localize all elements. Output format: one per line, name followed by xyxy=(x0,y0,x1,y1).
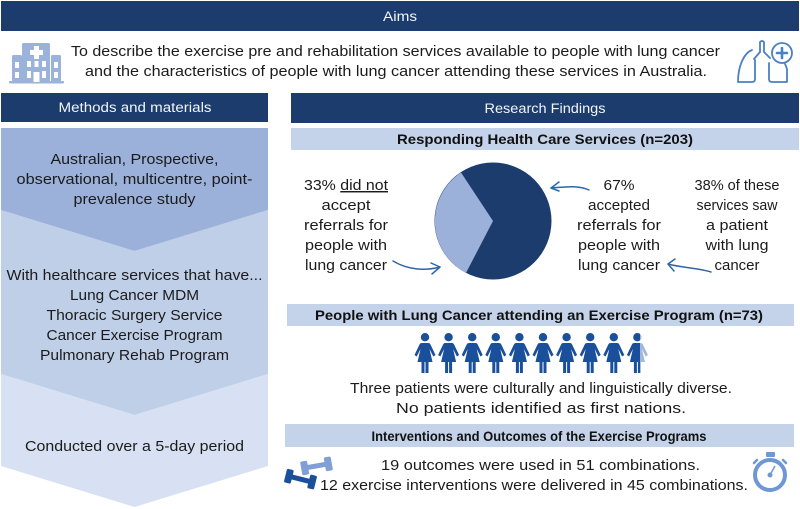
text: 67% accepted: people with xyxy=(578,238,660,254)
panel: methods flow xyxy=(1,128,268,507)
header: Research Findings xyxy=(291,93,799,123)
subheading: Responding Health Care Services xyxy=(291,128,799,150)
step 1: study design xyxy=(1,128,268,251)
text: outcomes and interventions: 19 outcomes were used in 51 combinations. xyxy=(381,458,700,474)
subheading: Responding Health Care Services: Responding Health Care Services (n=203) xyxy=(397,131,693,147)
text: 33% did not accept: accept xyxy=(322,198,370,214)
header: Methods and materials: Methods and materials xyxy=(58,100,212,115)
pie chart: referrals accepted xyxy=(434,162,552,280)
text: patient demographics: No patients identified as first nations. xyxy=(396,401,686,417)
step 3: study period: Conducted over a 5-day period xyxy=(25,439,244,455)
text: 67% accepted: referrals for xyxy=(577,218,661,234)
header: Aims xyxy=(1,1,799,31)
header: Aims: Aims xyxy=(383,9,417,24)
step 2: healthcare services: Lung Cancer MDM xyxy=(70,288,199,304)
text: 38% of these services: a patient xyxy=(706,218,768,234)
text: 67% accepted: 67% xyxy=(604,178,635,194)
subheading: People with Lung Cancer xyxy=(287,304,794,326)
arrow: to light wedge xyxy=(393,261,440,274)
text: 67% accepted: accepted xyxy=(588,198,650,214)
step 2: healthcare services: Pulmonary Rehab Program xyxy=(40,348,229,364)
text: 33% did not accept: 33% did not xyxy=(304,178,388,194)
step 2: healthcare services: With healthcare services that have... xyxy=(6,268,262,284)
text: patient demographics: Three patients were culturally and linguistically diverse. xyxy=(350,381,732,397)
text: 38% of these services: 38% of these xyxy=(694,178,780,194)
text: outcomes and interventions xyxy=(320,458,748,494)
arrow: from 38% to 67% xyxy=(668,259,711,272)
text: 33% did not accept: lung cancer xyxy=(305,258,387,274)
icon: stopwatch xyxy=(754,452,786,490)
icon: dumbbells xyxy=(284,456,333,490)
icon: lungs with plus xyxy=(738,41,792,82)
text: outcomes and interventions: 12 exercise interventions were delivered in 45 combinations. xyxy=(320,478,748,494)
text: 33% did not accept: people with xyxy=(305,238,387,254)
header: Methods and materials xyxy=(1,93,268,122)
step 1: study design: observational, multicentre, point- xyxy=(16,172,253,188)
aims statement xyxy=(71,43,720,80)
step 3: study period xyxy=(1,374,268,507)
text: 38% of these services: cancer xyxy=(714,258,760,274)
icon row: ten people xyxy=(414,333,650,374)
subheading: People with Lung Cancer: People with Lung Cancer attending an Exercise Program (n=73) xyxy=(315,307,763,323)
step 2: healthcare services: Thoracic Surgery Service xyxy=(46,308,222,324)
text: 38% of these services xyxy=(694,178,780,274)
aims statement: and the characteristics of people with lung cancer attending these services in Australia. xyxy=(85,63,707,80)
text: 67% accepted xyxy=(577,178,661,274)
text: 38% of these services: services saw xyxy=(696,198,778,214)
text: patient demographics xyxy=(350,381,732,417)
step 2: healthcare services: Cancer Exercise Program xyxy=(46,328,222,344)
text: 33% did not accept: referrals for xyxy=(304,218,388,234)
subheading: Interventions and Outcomes: Interventions and Outcomes of the Exercise Programs xyxy=(372,428,707,444)
step 2: healthcare services xyxy=(1,210,268,415)
step 1: study design: prevalence study xyxy=(74,192,196,208)
text: 33% did not accept xyxy=(304,178,388,274)
text: 38% of these services: with lung xyxy=(704,238,768,254)
arrow: to dark wedge xyxy=(551,182,589,191)
aims statement: To describe the exercise pre and rehabilitation services available to people with lung cancer xyxy=(71,43,720,60)
step 1: study design: Australian, Prospective, xyxy=(50,152,218,168)
subheading: Interventions and Outcomes xyxy=(285,424,794,447)
text: 67% accepted: lung cancer xyxy=(578,258,660,274)
header: Research Findings: Research Findings xyxy=(484,101,606,116)
icon: hospital xyxy=(9,43,64,84)
